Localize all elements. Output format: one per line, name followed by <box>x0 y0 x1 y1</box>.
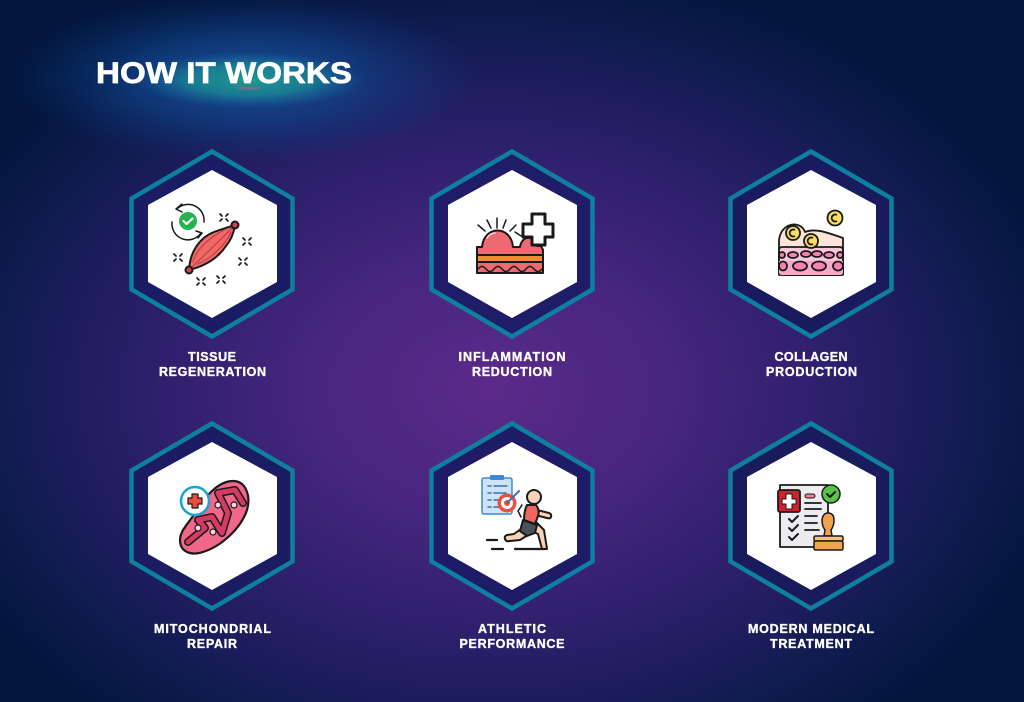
icon: inflamed skin <box>477 214 553 273</box>
hexagon white <box>448 170 577 318</box>
icon: muscle <box>172 204 238 274</box>
hexagon white <box>448 442 577 590</box>
label: INFLAMMATION <box>458 350 566 364</box>
icon: sparkles <box>174 214 251 285</box>
hexagon white <box>747 442 876 590</box>
icon: medical document <box>778 485 843 550</box>
panel: inflammation reduction <box>432 152 592 379</box>
label: ATHLETIC <box>478 622 546 636</box>
icon: collagen skin <box>779 210 843 275</box>
hexagon frame <box>132 152 292 336</box>
label: COLLAGEN <box>774 350 848 364</box>
label: PRODUCTION <box>766 365 857 379</box>
label: MITOCHONDRIAL <box>154 622 271 636</box>
hexagon white <box>148 170 277 318</box>
label: REDUCTION <box>472 365 552 379</box>
icon: runner with clipboard <box>482 475 551 549</box>
label: TREATMENT <box>770 637 852 651</box>
hexagon frame <box>730 424 892 608</box>
panel: tissue regeneration <box>132 152 292 379</box>
panel: collagen production <box>730 152 892 379</box>
hexagon frame <box>730 152 892 336</box>
label: PERFORMANCE <box>460 637 564 651</box>
label: TISSUE <box>188 350 236 364</box>
label: REPAIR <box>187 637 237 651</box>
title: HOW IT WORKS <box>96 57 352 90</box>
hexagon white <box>148 442 277 590</box>
hexagon frame <box>432 424 592 608</box>
panel: athletic performance <box>432 424 592 651</box>
glow behind title <box>10 0 480 162</box>
hexagon frame <box>132 424 292 608</box>
panel: modern medical treatment <box>730 424 892 651</box>
label: REGENERATION <box>159 365 266 379</box>
hexagon frame <box>432 152 592 336</box>
hexagon white <box>747 170 876 318</box>
label: MODERN MEDICAL <box>748 622 874 636</box>
icon: mitochondrion <box>180 481 248 554</box>
panel: mitochondrial repair <box>132 424 292 651</box>
